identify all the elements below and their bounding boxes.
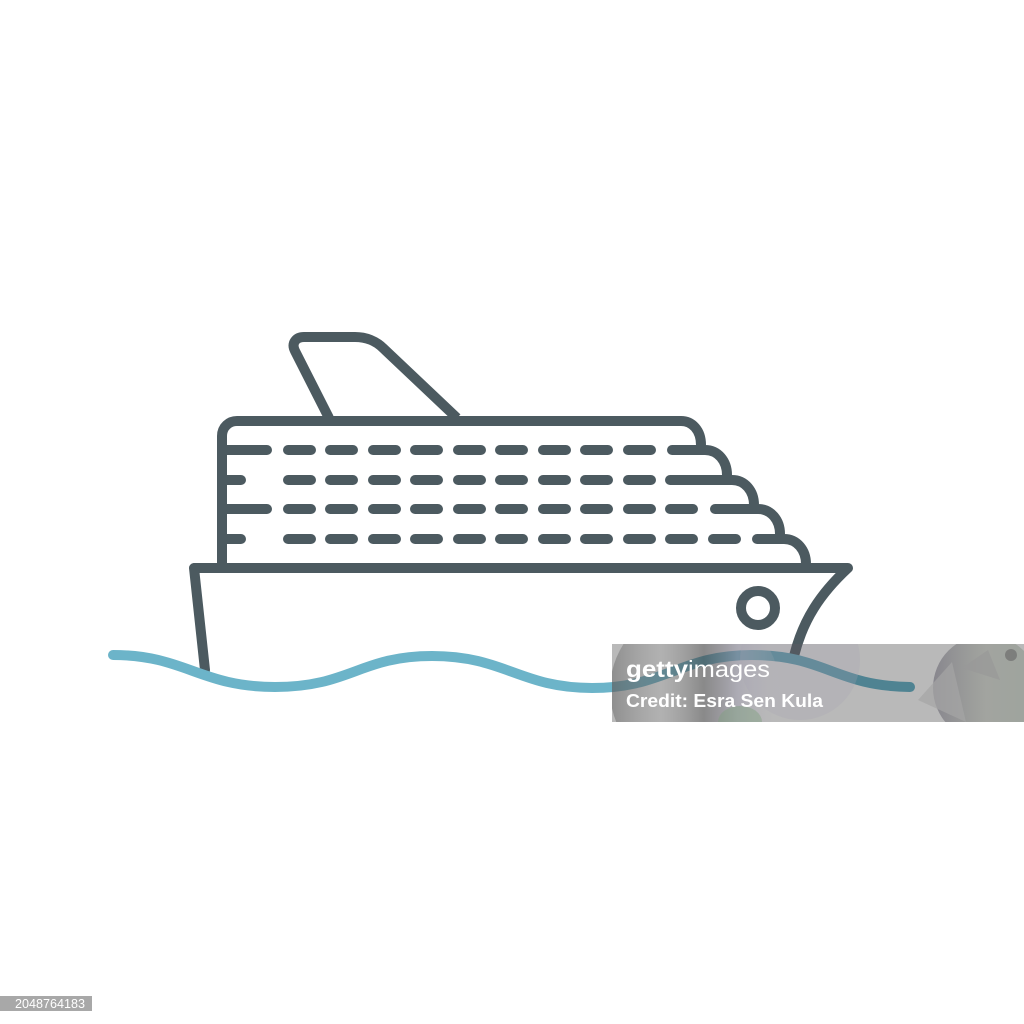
windows row 3 — [288, 504, 693, 514]
watermark shapes — [612, 644, 1024, 722]
watermark logo suffix: images — [688, 656, 770, 682]
icon: cruise ship — [194, 337, 848, 670]
windows row 1 — [288, 445, 651, 455]
credit line: Credit: Esra Sen Kula — [626, 691, 824, 711]
windows row 4 — [288, 534, 736, 544]
left deck stubs — [224, 450, 267, 539]
watermark logo: getty — [626, 656, 688, 682]
infographic: cruise ship line icon — [0, 332, 1024, 1011]
watermark panel — [612, 644, 1024, 722]
windows row 2 — [288, 475, 651, 485]
porthole — [741, 591, 775, 625]
funnel — [294, 337, 457, 418]
superstructure outline with stepped decks — [222, 421, 806, 566]
hull — [194, 568, 848, 670]
water wave — [113, 655, 910, 688]
image id tag: 2048764183 — [15, 997, 85, 1011]
